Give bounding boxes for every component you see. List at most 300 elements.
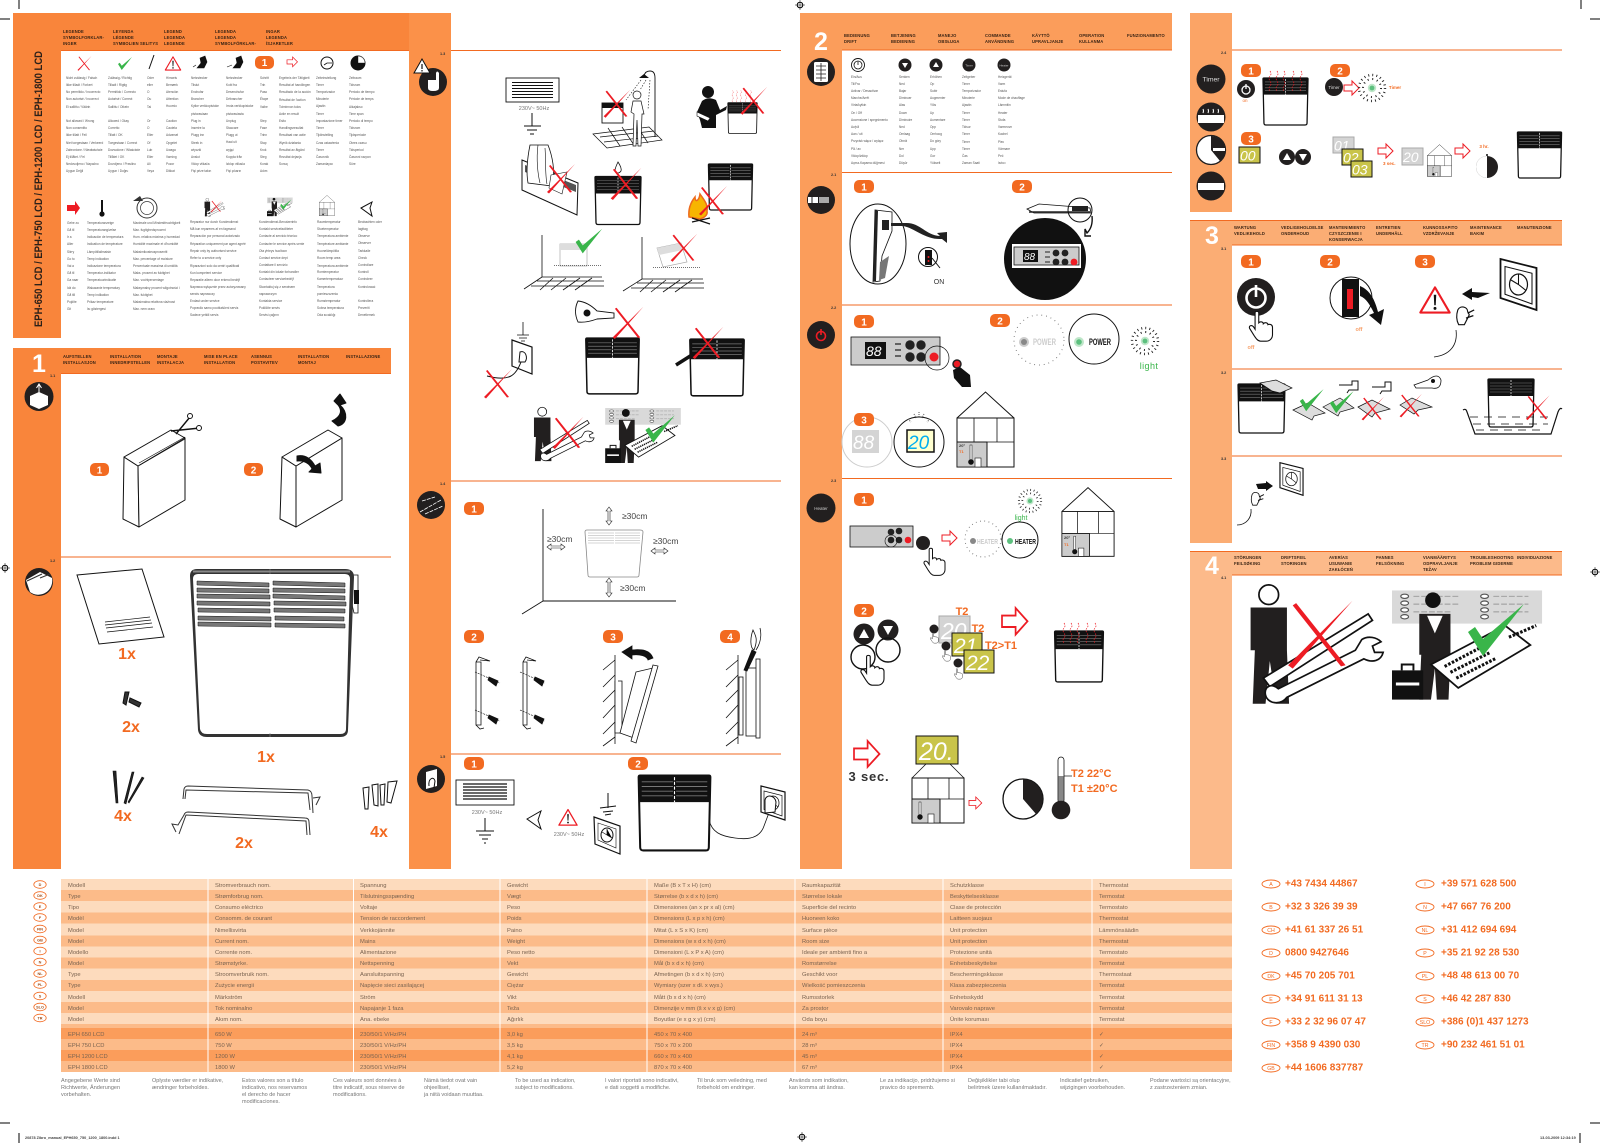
illustration: wiping heater (1238, 380, 1292, 433)
icon: thermometer (1052, 757, 1072, 819)
legend text columns row two: pomieszczenia (317, 292, 338, 296)
legend text columns row one: Resultaat van actie (279, 133, 306, 137)
step badge 1 (854, 493, 874, 506)
illustration: house with temperature: 20° (1064, 535, 1070, 540)
legend text columns row two: Sobna temperatura (317, 306, 344, 310)
table text: Beskyttelsesklasse (950, 894, 999, 900)
legend text columns row two: Maks. prosent av fuktighet (133, 271, 170, 275)
legend text columns row two: Refer to a service only (190, 256, 222, 260)
section 3 header labels: VZDRŽEVANJE (1423, 231, 1454, 236)
legend text columns row one: Bemærk (166, 83, 178, 87)
legend text columns row two: Lämpötilailmaisin (87, 250, 111, 254)
step badge 2: 2 (1327, 258, 1333, 268)
table text: IPX4 (950, 1054, 963, 1060)
display 00: 00 (1240, 148, 1256, 164)
service phone numbers: GB (1267, 1066, 1275, 1072)
legend text columns row one: Haal uit (226, 140, 237, 144)
legend text columns row one: Dikkat (166, 169, 175, 173)
disclaimer notes: wijzigingen voorbehouden. (1059, 1085, 1126, 1091)
step badge 1 (464, 757, 484, 770)
country codes: NL (37, 972, 43, 976)
control legend text: Marche/Arrêt (851, 96, 869, 100)
illustration: set temperature sequence (930, 606, 1017, 679)
legend text columns row one: Resultado de la acción (279, 90, 311, 94)
section 3 header labels: WARTUNG (1234, 225, 1256, 230)
step badge 2 (990, 314, 1010, 328)
step number 3.3: 3.3 (1221, 457, 1226, 461)
legend header labels: INGER (63, 41, 77, 46)
table text: Varovalo naprave (950, 1006, 995, 1012)
legend text columns row two: Kontakt servicefaciliteter (259, 227, 293, 231)
table text: Vægt (507, 894, 521, 900)
table text: Peso (507, 905, 520, 911)
legend text columns row one: O (147, 126, 150, 130)
legend text columns row one: Inserire la (191, 126, 205, 130)
icon: unpack box (24, 382, 54, 411)
legend text columns row one: Ei sallittu / Väärin (66, 105, 91, 109)
table text: Voltaje (360, 905, 377, 911)
section 2 header labels: ANVÄNDNING (985, 39, 1014, 44)
section 1 header labels: ASENNUS (251, 354, 272, 359)
country codes: D (39, 883, 42, 887)
section 2 header labels: BEDIENUNG (844, 33, 870, 38)
table text: Thermostat (1099, 916, 1129, 922)
table text: ✓ (1099, 1054, 1104, 1060)
legend text columns row two: Maximale und Mindestfeuchtigkeit (133, 221, 180, 225)
timer 3 hours (1476, 144, 1498, 178)
legend text columns row one: Eller (147, 155, 153, 159)
table text: Teža (507, 1006, 520, 1012)
table text: Aansluitspanning (360, 972, 404, 978)
icon: heater button: Heater (814, 506, 828, 511)
legend text columns row two: Gå til (67, 271, 75, 275)
icon: heating state (1196, 102, 1226, 132)
control legend text: Varmeovn (998, 125, 1012, 129)
legend text columns row one: wyjąć (226, 148, 234, 152)
legend text columns row one: wtyczki (191, 148, 201, 152)
illustration: set temperature sequence: T2>T1 (985, 640, 1017, 652)
legend text columns row one: Or (147, 119, 150, 123)
icon: power on (1237, 80, 1255, 103)
table text: Za prostor (802, 1006, 828, 1012)
table text: Superficie del recinto (802, 905, 856, 911)
table text: Protezione unità (950, 950, 993, 956)
section 2 header labels: KÄYTTÖ (1032, 33, 1050, 38)
illustration: plug back in (1237, 463, 1303, 525)
legend text columns row one: Esito (279, 119, 286, 123)
step badge 3: 3 (1422, 258, 1428, 268)
table text: Strømforbrug nom. (215, 894, 264, 900)
section 1 header labels: POSTAVITEV (251, 360, 278, 365)
table text: Akım nom. (215, 1017, 243, 1023)
legend text columns row one: Dozwolone / Właściwie (108, 148, 140, 152)
table text: Laitteen suojaus (950, 916, 992, 922)
service phone numbers: N (1423, 905, 1427, 911)
control legend text: Timer (962, 118, 970, 122)
illustration: call service (605, 408, 681, 463)
section 3 header labels: UNDERHÅLL (1376, 231, 1403, 236)
table text: Spannung (360, 883, 386, 889)
table text: IPX4 (950, 1065, 963, 1071)
legend text columns row one: Of (147, 141, 150, 145)
control legend text: Ner (899, 147, 904, 151)
table text: IPX4 (950, 1032, 963, 1038)
disclaimer notes: Används som indikation, (789, 1078, 849, 1084)
timer indicator light (1359, 75, 1401, 101)
control legend text: Ein/Aus (851, 75, 862, 79)
legend header labels: LEGENDE (63, 29, 84, 34)
disclaimer notes: subject to modifications. (515, 1085, 574, 1091)
control legend text: On / Off (851, 111, 862, 115)
section 1 header labels: INSTALLAZIONE (346, 354, 381, 359)
legend text columns row two: Indication de température (87, 242, 123, 246)
heading number 3: 3 (1205, 222, 1219, 250)
section 2 header labels: COMMANDE (985, 33, 1011, 38)
icon: list (807, 58, 835, 86)
legend header labels: LEYENDA (113, 29, 134, 34)
table text: Tok nominalno (215, 1006, 252, 1012)
service phone numbers: NL (1422, 928, 1428, 934)
control icons row: Timer (965, 64, 973, 68)
control icons row: Heater (999, 64, 1009, 68)
step number 1.5: 1.5 (440, 755, 445, 759)
control legend text: Bajar (899, 89, 906, 93)
table text: Nettspenning (360, 961, 394, 967)
section 4 header labels: PROBLEM GIDERME (1470, 561, 1513, 566)
step badge 2: 2 (861, 606, 867, 618)
disclaimer notes: ændringer forbeholdes. (152, 1085, 209, 1091)
illustration: heating heater (1055, 623, 1103, 682)
legend text columns row one: Eller (147, 133, 153, 137)
legend text columns row one: Süre (349, 162, 356, 166)
legend text columns row one: Résultat de l'action (279, 98, 306, 102)
step badge 3: 3 (861, 416, 867, 426)
step number 3.2: 3.2 (1221, 371, 1226, 375)
table text: Unit protection (950, 939, 987, 945)
legend text columns row one: Adım (260, 169, 268, 173)
section 3 header labels: ONDERHOUD (1281, 231, 1309, 236)
section 3 header labels (1234, 225, 1552, 242)
illustration: grounded socket (594, 793, 620, 854)
legend text columns row two: Gå till (67, 293, 75, 297)
legend text columns row two: Contacter le service après-vente (259, 242, 304, 246)
table text: Poids (507, 916, 522, 922)
legend text columns row one: Sonuç (279, 162, 288, 166)
legend text columns row two: Kontrollera (358, 299, 373, 303)
table text: Schutzklasse (950, 883, 984, 889)
legend header labels: INGAR (266, 29, 280, 34)
legend text columns row one: Steg (260, 155, 267, 159)
legend text columns row two: Wskazanie temperatury (87, 286, 120, 290)
illustration: wall plugs (363, 781, 397, 809)
control legend text: Ylös (930, 103, 937, 107)
disclaimer notes: Indicatief gebruiken, (1060, 1078, 1110, 1084)
legend text columns row one: Oder (147, 76, 154, 80)
legend text columns row one: Czas ustawienia (316, 141, 339, 145)
legend text columns row one: Ergebnis der Tätigkeit (279, 76, 310, 80)
legend text columns row one: Non autorisé / Incorrect (66, 97, 99, 101)
arrow (1002, 608, 1028, 635)
icon: display (807, 186, 835, 214)
service phone numbers: P (1423, 951, 1427, 957)
step number 4.1: 4.1 (1221, 576, 1226, 580)
table text: Model (68, 928, 84, 934)
table text: 5,2 kg (507, 1065, 523, 1071)
legend text columns row two: Endast under service (190, 299, 220, 303)
control legend text: Accensione / spegnimento (851, 118, 888, 122)
table text: Ciężar (507, 983, 524, 989)
table text: 650 W (215, 1032, 232, 1038)
legend text columns row one: Kobl fra (226, 83, 237, 87)
illustration: hanging heater (603, 646, 658, 746)
legend text columns row one: Kytke verkkopistoke (191, 104, 219, 108)
panel: section 3 maintenance (1190, 220, 1562, 543)
table text: Enhetsbeskyttelse (950, 961, 997, 967)
control legend text: Timer (962, 111, 970, 115)
table text: IPX4 (950, 1043, 963, 1049)
legend text columns row one: pistorasiaan (191, 112, 208, 116)
legend text columns row one: Période de temps (349, 97, 374, 101)
legend text columns row two: Ga naar (67, 278, 78, 282)
legend symbols row two (67, 195, 372, 218)
illustration: house with temperature: T1 (1064, 542, 1069, 547)
legend header labels: SYMBOLFÖRKLAR- (215, 41, 256, 46)
label 3 sec: 3 sec. (849, 769, 889, 784)
legend text columns row one: Časovnik (316, 154, 329, 159)
disclaimer notes: indicativo, nos reservamos (242, 1085, 307, 1091)
disclaimer notes: Oplyste værdier er indikative, (152, 1078, 224, 1084)
legend text columns row one: Opgelet (166, 141, 177, 145)
legend text columns row two: Humidité maximale et d'humidité (133, 242, 179, 246)
illustration: no self repair (534, 407, 594, 461)
step badge 1 (1241, 64, 1261, 78)
illustration: press power on panel (851, 337, 971, 387)
section 2 header labels (844, 33, 1165, 44)
table text: Termostat (1099, 894, 1125, 900)
up and down buttons (1279, 149, 1311, 165)
legend text columns row two: Max. fugtighedsprocent (133, 228, 166, 232)
legend text columns row one: Koppla från (226, 155, 242, 159)
control legend text: Timer (962, 132, 970, 136)
legend header labels: LÉGENDE (113, 35, 134, 40)
legend text columns row two: Room temp area (317, 256, 341, 260)
section 2 header labels: KULLANMA (1079, 39, 1103, 44)
section 2 header labels: BEDIENING (891, 39, 915, 44)
section 4 header labels: USUWANIE (1329, 561, 1352, 566)
service phone numbers: +47 667 76 200 (1441, 902, 1511, 912)
legend text columns row two: Stuetemperatur (317, 227, 339, 231)
table text: Geschikt voor (802, 972, 838, 978)
legend text columns row two: Gehe zu (67, 221, 79, 225)
legend text columns row two: Reparatie alleen door erkend bedrijf (190, 278, 240, 282)
section 4 header labels: DRIFTSFEIL (1281, 555, 1307, 560)
table text: Oda boyu (802, 1017, 827, 1023)
section 4 header labels: STORINGEN (1281, 561, 1307, 566)
disclaimer notes: Le za indikacijo, pridržujemo si (880, 1078, 955, 1084)
service phone numbers: +45 70 205 701 (1285, 970, 1355, 982)
legend text columns row two: Gå til (67, 228, 75, 232)
table text: Napięcie sieci zasilającej (360, 983, 424, 989)
legend text columns row two: Temperatura (317, 285, 335, 289)
table text: Afmetingen (b x d x h) (cm) (654, 972, 724, 978)
control legend text: Erhöhen (930, 75, 942, 79)
indicator light (1015, 490, 1041, 522)
table row bands (61, 879, 1232, 1072)
country codes: SLO (36, 1006, 44, 1010)
legend text columns row two: Naprawa wyłącznie przez autoryzowany (190, 285, 246, 289)
section 2 header labels: OPERATION (1079, 33, 1104, 38)
control legend text: Senken (899, 75, 910, 79)
legend text columns row one: Resultat af handlingen (279, 83, 311, 87)
legend text columns row one: Hinweis (166, 76, 177, 80)
step badge 2 (464, 630, 484, 644)
section 3 header labels: VEDLIKEHOLD (1234, 231, 1265, 236)
legend text columns row one: Tilladt / Rigtig (108, 83, 127, 87)
legend text columns row two: Max. nem oranı (133, 307, 155, 311)
legend text columns row one: Vaihe (260, 105, 268, 109)
disclaimer notes: Değişiklikler tabi olup (968, 1078, 1020, 1084)
legend text columns row one: Fişi çıkarın (226, 169, 241, 173)
illustration: house with temperature (1062, 488, 1114, 556)
table text: 750 x 70 x 200 (654, 1043, 692, 1049)
table text: Modèl (68, 916, 84, 922)
illustration: set temperature sequence: 20 (940, 618, 967, 644)
step badge 1: 1 (471, 504, 477, 516)
icon: heater button (806, 494, 836, 522)
legend text columns row one: O (147, 90, 150, 94)
disclaimer notes: vorbehalten. (61, 1092, 92, 1098)
service phone numbers: +90 232 461 51 01 (1441, 1040, 1525, 1050)
legend text columns row one: Tilslut (191, 83, 199, 87)
legend text columns row one: Not allowed / Wrong (66, 119, 94, 123)
legend text columns row two: Contact service dept (259, 256, 288, 260)
legend text columns row two: Max. percentage of moisture (133, 257, 173, 261)
table text: Wielkość pomieszczenia (802, 983, 866, 989)
table text: 4,1 kg (507, 1054, 523, 1060)
country codes: F (39, 916, 42, 920)
legend text columns row one: Tillåtet / OK (108, 155, 125, 159)
illustration: cutting the box (123, 414, 202, 527)
country codes: FIN (37, 928, 43, 932)
section 1 header labels: MONTAJE (157, 354, 178, 359)
step badge 2: 2 (997, 316, 1003, 328)
illustration: heater not in water (1463, 379, 1562, 434)
disclaimer notes: e dati soggetti a modifiche. (605, 1085, 671, 1091)
legend text columns row two: Iagttag (358, 227, 368, 231)
table text: Dimensioni (L x P x A) (cm) (654, 950, 724, 956)
table text: Maße (B x T x H) (cm) (654, 883, 711, 889)
illustration: wall brackets (172, 786, 320, 835)
legend text columns row one: Netzstecker (191, 76, 208, 80)
legend text columns row one: Tai (147, 105, 151, 109)
legend text columns row one: Izklop vtikača (226, 162, 245, 166)
legend text columns row one: Trin (260, 83, 266, 87)
legend text columns row one: Nicht zulässig / Falsch (66, 76, 97, 80)
table text: 230/50/1 V/Hz/PH (360, 1054, 406, 1060)
table text: Raumkapazität (802, 883, 841, 889)
legend text columns row one: Ali (147, 162, 151, 166)
icon: power button (807, 321, 835, 349)
control legend text: På / av (851, 147, 861, 151)
disclaimer notes: To be used as indication, (515, 1078, 576, 1084)
legend text columns row one: Plug in (191, 119, 201, 123)
legend header labels: LEGENDE (164, 41, 185, 46)
step badge 3: 3 (610, 632, 616, 644)
legend text columns row two: Kontroll (358, 270, 369, 274)
legend text columns row two: Tarkkaile (358, 249, 371, 253)
section 3 header labels: BAKIM (1470, 231, 1485, 236)
country codes: GB (37, 938, 43, 942)
table text: Termostato (1099, 950, 1128, 956)
legend text columns row two: Servisi çağırın (259, 313, 279, 317)
section 1 header labels: INSTALLATION (110, 354, 141, 359)
table text: Dimensions (L x p x h) (cm) (654, 916, 725, 922)
table text: ✓ (1099, 1065, 1104, 1071)
service phone numbers: +44 1606 837787 (1285, 1062, 1364, 1074)
illustration: control panel location: 88 (1024, 252, 1036, 263)
control legend text: Peč (998, 154, 1004, 158)
legend text columns row one: Impostazione timer (316, 119, 343, 123)
country codes (34, 881, 46, 1022)
table text: 870 x 70 x 400 (654, 1065, 692, 1071)
legend text columns row one: Zulässig / Richtig (108, 76, 132, 80)
control legend text: Alas (899, 103, 906, 107)
legend text columns row two: Controleer (358, 277, 373, 281)
legend text columns row two: Denetlemek (358, 313, 375, 317)
legend text columns row two: Temperatuurindicatie (87, 278, 116, 282)
service phone numbers: SLO (1420, 1020, 1430, 1026)
legend text columns row two: Contattare il servizio (259, 263, 288, 267)
legend text columns row one: Ikke tilladt / Forkert (66, 83, 93, 87)
arrow (854, 741, 880, 767)
legend text columns row one: Tidsrom (349, 126, 361, 130)
service phone numbers: PL (1422, 974, 1428, 980)
service phone numbers: +43 7434 44867 (1285, 878, 1358, 890)
step badge 1: 1 (861, 496, 867, 506)
control legend text: Up (930, 111, 934, 115)
legend text columns row two: Pojdite (67, 300, 77, 304)
control legend text: Gor (930, 154, 935, 158)
illustration: heater plugged in (639, 776, 785, 850)
step badge 2 (854, 604, 874, 618)
disclaimer notes: modificaciones. (242, 1099, 280, 1105)
illustration: opening the box (280, 394, 346, 527)
illustration: socket and damaged cable (484, 322, 532, 398)
table text: Vikt (507, 995, 517, 1001)
legend text columns row one: Unplug (226, 119, 236, 123)
section 4 header labels: TROUBLESHOOTING (1470, 555, 1514, 560)
legend text columns row two: Temp indikation (87, 293, 109, 297)
legend text columns row two: Isı göstergesi (87, 307, 106, 311)
temperature values: T2 22°C (1071, 768, 1112, 780)
section 4 header labels: STÖRUNGEN (1234, 555, 1262, 560)
step number 2.2: 2.2 (831, 306, 836, 310)
legend text columns row two: Contacte al servicio técnico (259, 234, 297, 238)
step number 3.1: 3.1 (1221, 247, 1226, 251)
section 2 header labels: OBSŁUGA (938, 39, 960, 44)
section 1 header labels: INSTALLASJON (63, 360, 96, 365)
illustration: no chemicals on heater (576, 301, 644, 394)
legend text columns row one: Enchufar (191, 90, 204, 94)
legend text columns row two: Kundendienst-Benutzerinfo (259, 220, 297, 224)
legend text columns row one: Cautela (166, 126, 177, 130)
step badge 1 (854, 315, 874, 328)
control legend text: Minuterie (962, 96, 975, 100)
legend text columns row one: Ikke tillatt / Feil (66, 133, 87, 137)
legend text columns row two: Popravilo samo pooblaščeni servis (190, 306, 239, 310)
table text: Stromverbrauch nom. (215, 883, 271, 889)
control legend text: Lämmitin (998, 103, 1011, 107)
